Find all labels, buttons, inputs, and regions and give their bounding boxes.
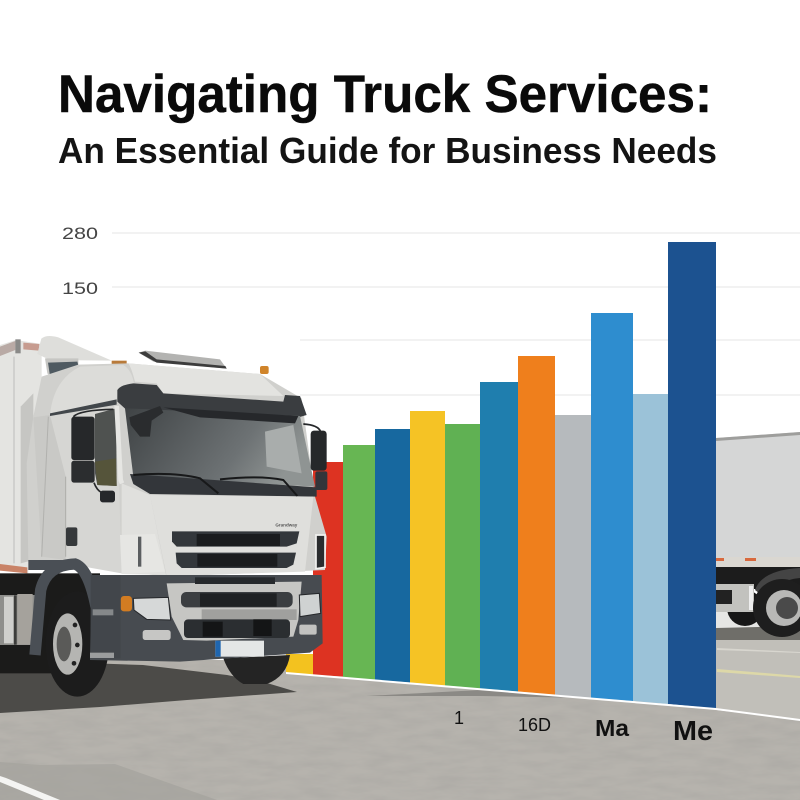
x axis labels xyxy=(454,708,713,746)
headlights xyxy=(121,593,321,640)
background truck at right xyxy=(716,432,800,637)
windshield xyxy=(125,408,315,487)
y axis labels: 280 xyxy=(62,224,98,243)
y axis labels xyxy=(62,224,98,298)
mirrors xyxy=(71,406,327,502)
title: An Essential Guide for Business Needs xyxy=(58,130,717,171)
roof vent and marker lights xyxy=(112,351,269,374)
x axis labels: 16D xyxy=(518,715,551,735)
bumper xyxy=(90,575,323,662)
left front wheel xyxy=(46,591,109,697)
x axis labels: Ma xyxy=(595,715,629,741)
y axis labels: 150 xyxy=(62,279,98,298)
roof panel xyxy=(128,363,283,396)
bar chart xyxy=(286,242,800,721)
front truck xyxy=(0,336,327,697)
title: Navigating Truck Services: xyxy=(58,65,712,124)
x axis labels: 1 xyxy=(454,708,464,728)
side window xyxy=(95,406,122,486)
license plate xyxy=(215,641,264,657)
title xyxy=(58,65,717,171)
grille xyxy=(172,531,325,569)
fender panel and steps xyxy=(90,575,121,658)
wheel arch xyxy=(28,564,96,655)
logo: Grandway xyxy=(275,523,298,529)
right front wheel xyxy=(223,655,290,684)
x axis labels: Me xyxy=(673,715,713,746)
truck shadow xyxy=(0,660,297,713)
visor xyxy=(117,383,307,417)
spoiler xyxy=(37,336,112,376)
undercarriage and fuel tank xyxy=(0,573,100,673)
cargo box xyxy=(0,339,42,573)
cowl and wipers xyxy=(130,474,317,497)
door panels xyxy=(33,399,122,573)
ground xyxy=(0,612,800,800)
upper door fairing xyxy=(50,365,134,415)
cab body silhouette xyxy=(27,363,327,577)
chart gridlines xyxy=(112,233,800,395)
front panel xyxy=(120,483,313,576)
